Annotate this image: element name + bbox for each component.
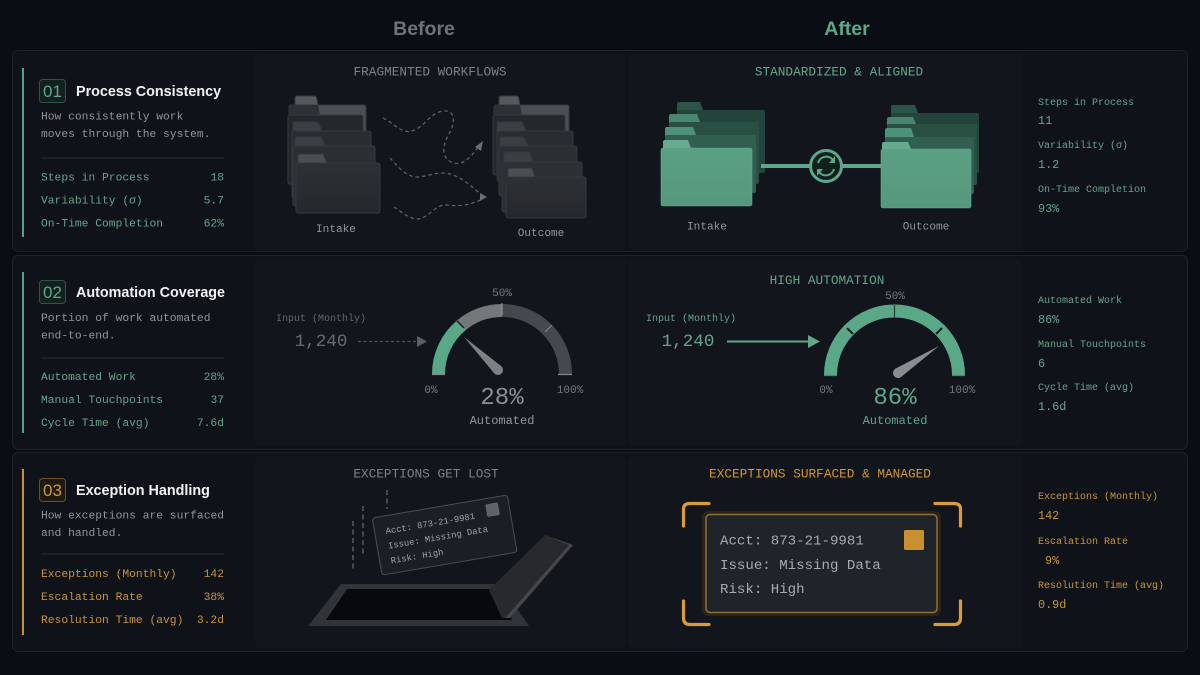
before metrics: On-Time Completion <box>41 218 163 230</box>
panel heading: HIGH AUTOMATION <box>770 273 884 288</box>
icon: outcome folder stack <box>493 96 586 218</box>
heading: After: After <box>824 18 870 40</box>
panel: row 1 process consistency <box>12 50 1188 252</box>
gauge value: 86% <box>873 385 917 412</box>
gauge value: 28% <box>480 385 524 412</box>
before metrics <box>41 569 224 627</box>
after metrics: Steps in Process <box>1038 97 1134 109</box>
after metrics: Resolution Time (avg) <box>1038 580 1164 592</box>
title: Process Consistency <box>76 84 221 100</box>
before metrics: Resolution Time (avg) <box>41 615 183 627</box>
icon: intake folder stack <box>288 96 380 213</box>
gauge tick labels: 0% <box>424 385 438 397</box>
gauge caption: Automated <box>863 414 927 428</box>
before metrics <box>41 372 224 430</box>
panel: before low automation gauge <box>255 259 626 446</box>
accent bar <box>22 68 24 237</box>
label: intake: Intake <box>687 222 727 234</box>
accent bar <box>22 272 24 433</box>
after metrics: 142 <box>1038 509 1059 523</box>
input label and value: Input (Monthly) <box>276 313 366 325</box>
gauge tick labels: 100% <box>557 385 584 397</box>
input label and value: Input (Monthly) <box>646 313 736 325</box>
panel: row 3 exception handling <box>12 452 1188 652</box>
arrow: connector with sync icon <box>761 150 881 182</box>
panel: before exceptions lost <box>255 456 626 648</box>
card: tilted exception record: Issue: Missing Data <box>387 525 490 552</box>
before metrics: 28% <box>204 372 224 384</box>
card: tilted exception record: Acct: 873-21-9981 <box>385 512 476 537</box>
card: tilted exception record: Risk: High <box>390 548 444 566</box>
after metrics: 0.9d <box>1038 598 1066 612</box>
falling motion dashes <box>353 490 387 569</box>
description: How consistently work <box>41 112 184 124</box>
gauge tick labels <box>424 288 584 397</box>
panel heading: EXCEPTIONS GET LOST <box>353 466 499 482</box>
description: Portion of work automated <box>41 313 210 325</box>
description: end-to-end. <box>41 330 116 342</box>
after metrics: 6 <box>1038 357 1045 371</box>
chart: gauge 86 percent <box>824 305 965 378</box>
input label and value: 1,240 <box>662 332 714 352</box>
after metrics: On-Time Completion <box>1038 184 1146 196</box>
panel: after exceptions surfaced <box>628 456 1022 648</box>
gauge tick labels: 50% <box>492 288 512 300</box>
before metrics: 37 <box>210 395 224 407</box>
number badge 03 <box>40 478 66 502</box>
before metrics: Escalation Rate <box>41 592 143 604</box>
after metrics: Escalation Rate <box>1038 536 1128 548</box>
after metrics: Automated Work <box>1038 295 1122 307</box>
before metrics: 7.6d <box>197 418 224 430</box>
after metrics: Manual Touchpoints <box>1038 339 1146 351</box>
before metrics: 62% <box>204 218 224 230</box>
before metrics: Exceptions (Monthly) <box>41 569 177 581</box>
description: and handled. <box>41 528 122 540</box>
arrows: fragmented dashed paths <box>383 111 487 219</box>
arrow: solid input <box>727 335 820 348</box>
panel heading: STANDARDIZED & ALIGNED <box>755 64 923 80</box>
after metrics: Variability (σ) <box>1038 140 1128 152</box>
card: tilted exception record <box>372 495 517 575</box>
heading: Before: Before <box>393 18 455 40</box>
input label and value <box>276 313 366 352</box>
panel: row 2 automation coverage <box>12 256 1188 450</box>
focus brackets <box>684 504 960 624</box>
card: exception record: Acct: 873-21-9981 <box>720 534 864 550</box>
after metrics: 93% <box>1038 202 1060 216</box>
after metrics: 9% <box>1045 554 1060 568</box>
after metrics: Cycle Time (avg) <box>1038 382 1134 394</box>
arrow: dashed input <box>358 336 427 347</box>
card: exception record: Issue: Missing Data <box>720 558 881 574</box>
number badge 02: 02 <box>43 283 62 302</box>
input label and value: 1,240 <box>295 332 347 352</box>
gauge tick labels: 100% <box>949 385 976 397</box>
after metrics: 11 <box>1038 114 1052 128</box>
panel heading: FRAGMENTED WORKFLOWS <box>353 64 507 80</box>
after metrics <box>1038 491 1164 612</box>
label: outcome: Outcome <box>903 222 949 234</box>
after metrics: 1.6d <box>1038 400 1066 414</box>
input label and value <box>646 313 736 352</box>
before metrics: 5.7 <box>204 196 224 208</box>
icon: open trap door <box>308 535 573 626</box>
number badge 02 <box>40 280 66 304</box>
gauge tick labels: 0% <box>819 385 833 397</box>
before metrics <box>41 172 224 230</box>
accent bar <box>22 469 24 635</box>
icon: intake aligned folders <box>661 102 765 206</box>
before metrics: 3.2d <box>197 615 224 627</box>
panel heading: EXCEPTIONS SURFACED & MANAGED <box>709 466 931 482</box>
before metrics: 18 <box>210 172 224 184</box>
title: Exception Handling <box>76 483 210 499</box>
label: intake: Intake <box>316 224 356 236</box>
before metrics: 38% <box>204 592 224 604</box>
card: exception record <box>702 511 941 616</box>
number badge 03: 03 <box>43 481 62 500</box>
before metrics: Steps in Process <box>41 172 149 184</box>
before metrics: Automated Work <box>41 372 136 384</box>
before metrics: Cycle Time (avg) <box>41 418 149 430</box>
after metrics: 1.2 <box>1038 158 1059 172</box>
after metrics: 86% <box>1038 313 1060 327</box>
panel: before fragmented workflows <box>255 54 626 250</box>
card: exception record: Risk: High <box>720 582 805 598</box>
panel: after standardized and aligned <box>628 54 1022 250</box>
gauge tick labels <box>819 291 976 397</box>
after metrics <box>1038 97 1146 216</box>
after metrics: Exceptions (Monthly) <box>1038 491 1158 503</box>
description: How exceptions are surfaced <box>41 510 224 522</box>
gauge caption: Automated <box>470 414 534 428</box>
before metrics: Variability (σ) <box>41 196 143 208</box>
number badge 01: 01 <box>43 82 62 101</box>
icon: outcome aligned folders <box>881 105 979 208</box>
description: moves through the system. <box>41 129 210 141</box>
title: Automation Coverage <box>76 285 225 301</box>
before metrics: 142 <box>204 569 224 581</box>
number badge 01 <box>40 80 66 102</box>
chart: gauge 28 percent <box>432 303 572 375</box>
label: outcome: Outcome <box>518 228 564 240</box>
panel: after high automation gauge <box>628 259 1022 446</box>
after metrics <box>1038 295 1146 414</box>
gauge tick labels: 50% <box>885 291 905 303</box>
before metrics: Manual Touchpoints <box>41 395 163 407</box>
